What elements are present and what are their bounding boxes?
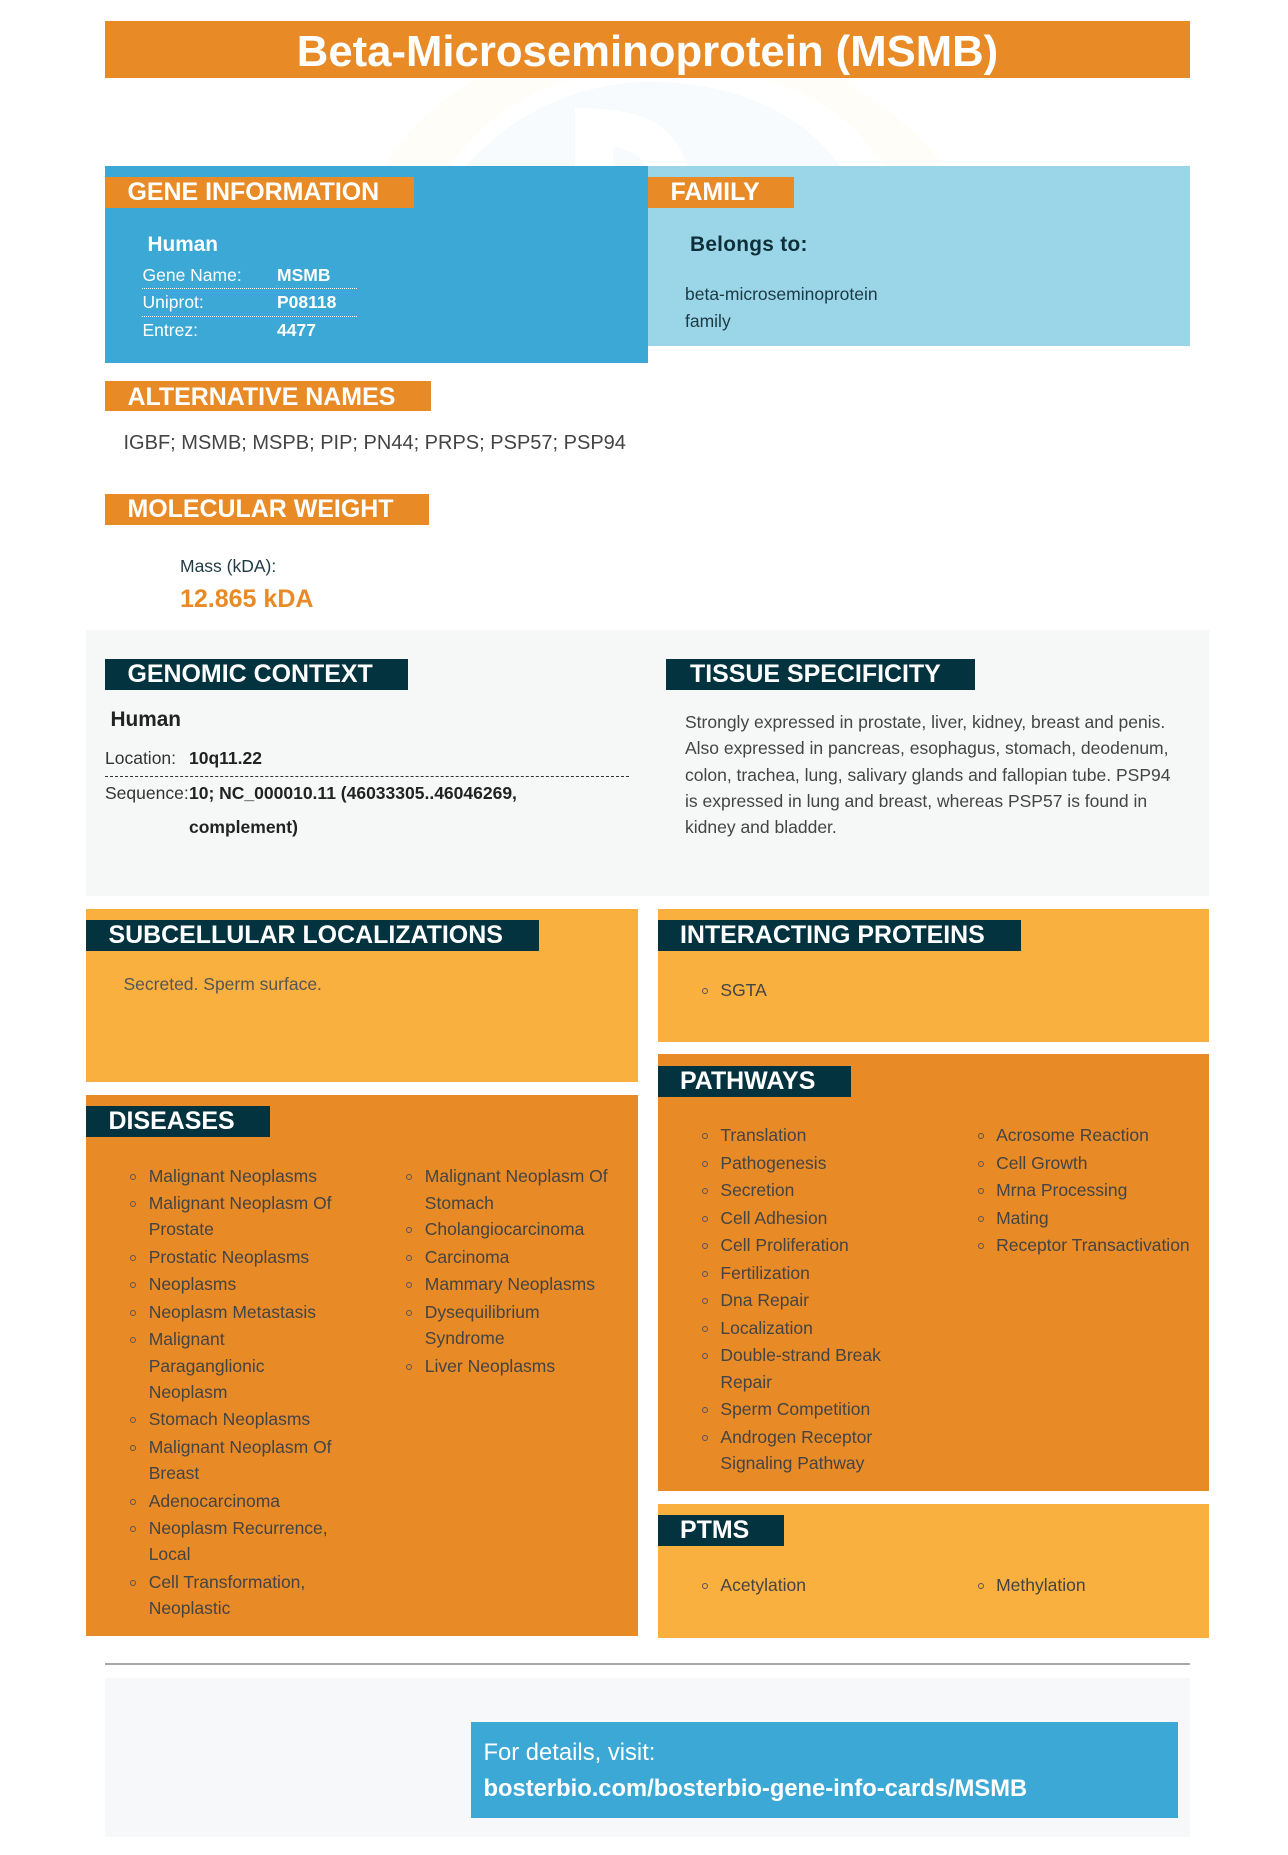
tissue specificity text: colon, trachea, lung, salivary glands and fallopian tube. PSP94 [685,765,1170,785]
disease list column 1: Prostate [149,1219,214,1239]
panel: subcellular localizations [86,909,638,1082]
panel: footer [105,1678,1190,1837]
title [105,21,1190,78]
disease list column 2: Liver Neoplasms [425,1356,555,1376]
protein list: SGTA [720,980,767,1000]
disease list column 1: Malignant Neoplasm Of [149,1437,332,1457]
panel: ptms [658,1504,1209,1638]
disease list column 1: Neoplasm [149,1382,227,1402]
panel: diseases [86,1095,638,1636]
disease list column 1: Cell Transformation, [149,1572,305,1592]
pathway list column 1: Pathogenesis [720,1153,826,1173]
pathway list column 2: Acrosome Reaction [996,1125,1149,1145]
panel: genomic context and tissue specificity [86,630,1209,896]
disease list column 1: Neoplasm Metastasis [149,1302,316,1322]
species label: Human [110,708,181,731]
heading: tissue specificity: TISSUE SPECIFICITY [690,660,941,688]
heading: pathways: PATHWAYS [680,1066,815,1094]
pathway list column 1: Cell Adhesion [720,1208,827,1228]
heading: molecular weight: MOLECULAR WEIGHT [128,494,393,522]
heading: ptms: PTMS [680,1516,749,1544]
ptm item: acetylation: Acetylation [720,1575,806,1595]
gene identifiers table: MSMB [277,265,330,285]
gene identifiers table: Gene Name: [142,265,242,285]
disease list column 1: Malignant Neoplasms [149,1166,317,1186]
url: bosterbio.com/bosterbio-gene-info-cards/MSMB [484,1775,1027,1802]
pathway list column 1: Fertilization [720,1263,810,1283]
heading: family: FAMILY [670,178,760,206]
disease list column 2: Stomach [425,1192,494,1212]
ptm item: methylation: Methylation [996,1575,1086,1595]
localization text: Secreted. Sperm surface. [124,974,322,994]
pathway list column 2: Cell Growth [996,1153,1088,1173]
mass value: 12.865 kDA [180,585,313,613]
belongs to label: Belongs to: [690,233,808,256]
pathway list column 1: Double-strand Break [720,1345,881,1365]
family description: beta-microseminoprotein [685,284,878,304]
mass label: Mass (kDA): [180,556,276,576]
heading: diseases: DISEASES [108,1106,235,1134]
disease list column 1: Local [149,1544,191,1564]
pathway list column 1: Androgen Receptor [720,1427,872,1447]
pathway list column 2 [978,1125,1190,1255]
disease list column 2 [406,1166,608,1376]
pathway list column 1 [702,1125,881,1473]
panel: family [648,166,1190,346]
species label: Human [148,233,218,256]
pathway list column 1: Sperm Competition [720,1399,870,1419]
tissue specificity text [685,712,1170,837]
pathway list column 2: Receptor Transactivation [996,1235,1190,1255]
pathway list column 1: Signaling Pathway [720,1453,864,1473]
pathway list column 1: Cell Proliferation [720,1235,849,1255]
background watermark logo [340,78,980,166]
disease list column 2: Syndrome [425,1328,505,1348]
tissue specificity text: Also expressed in pancreas, esophagus, stomach, deodenum, [685,738,1168,758]
panel: interacting proteins [658,909,1209,1042]
pathway list column 1: Secretion [720,1180,794,1200]
genomic location rows: Sequence: [105,783,189,803]
heading: ptms [658,1515,784,1546]
gene identifiers table: P08118 [277,292,336,312]
pathway list column 2: Mating [996,1208,1049,1228]
family description: family [685,311,731,331]
callout: details link [471,1722,1178,1818]
disease list column 2: Carcinoma [425,1247,509,1267]
alternative names text: IGBF; MSMB; MSPB; PIP; PN44; PRPS; PSP57; PSP94 [124,432,626,454]
disease list column 1: Breast [149,1463,199,1483]
heading: interacting proteins: INTERACTING PROTEINS [680,920,985,948]
pathway list column 1: Translation [720,1125,806,1145]
disease list column 2: Cholangiocarcinoma [425,1219,584,1239]
heading: subcellular localizations: SUBCELLULAR LOCALIZATIONS [108,920,503,948]
disease list column 1: Stomach Neoplasms [149,1409,310,1429]
disease list column 1: Prostatic Neoplasms [149,1247,309,1267]
disease list column 2: Mammary Neoplasms [425,1274,595,1294]
family description [685,284,878,331]
heading: gene information: GENE INFORMATION [128,178,379,206]
tissue specificity text: kidney and bladder. [685,817,837,837]
gene identifiers table: Uniprot: [142,292,204,312]
tissue specificity text: Strongly expressed in prostate, liver, kidney, breast and penis. [685,712,1165,732]
disease list column 1: Paraganglionic [149,1356,264,1376]
genomic location rows: 10q11.22 [189,748,262,768]
disease list column 1 [130,1166,332,1618]
disease list column 1: Neoplastic [149,1598,230,1618]
disease list column 2: Dysequilibrium [425,1302,540,1322]
pathway list column 1: Repair [720,1372,772,1392]
heading: alternative names: ALTERNATIVE NAMES [128,382,395,410]
pathway list column 2: Mrna Processing [996,1180,1127,1200]
gene identifiers table [142,265,357,340]
disease list column 1: Adenocarcinoma [149,1491,280,1511]
genomic location rows [105,748,629,837]
heading: family [648,177,794,208]
disease list column 1: Malignant Neoplasm Of [149,1193,332,1213]
pathway list column 1: Dna Repair [720,1290,809,1310]
disease list column 1: Neoplasms [149,1274,236,1294]
genomic location rows: Location: [105,748,176,768]
genomic location rows: 10; NC_000010.11 (46033305..46046269, [189,783,517,803]
visit label: For details, visit: [484,1739,655,1766]
disease list column 1: Neoplasm Recurrence, [149,1518,328,1538]
heading: diseases [86,1106,270,1137]
disease list column 2: Malignant Neoplasm Of [425,1166,608,1186]
title: Beta-Microseminoprotein (MSMB) [297,27,998,76]
pathway list column 1: Localization [720,1318,813,1338]
gene identifiers table: 4477 [277,320,316,340]
tissue specificity text: is expressed in lung and breast, whereas PSP57 is found in [685,791,1147,811]
panel: gene information [105,166,648,363]
disease list column 1: Malignant [149,1329,225,1349]
genomic location rows: complement) [189,817,298,837]
panel: pathways [658,1054,1209,1491]
gene identifiers table: Entrez: [142,320,198,340]
heading: genomic context: GENOMIC CONTEXT [128,660,373,688]
heading: pathways [658,1066,851,1097]
